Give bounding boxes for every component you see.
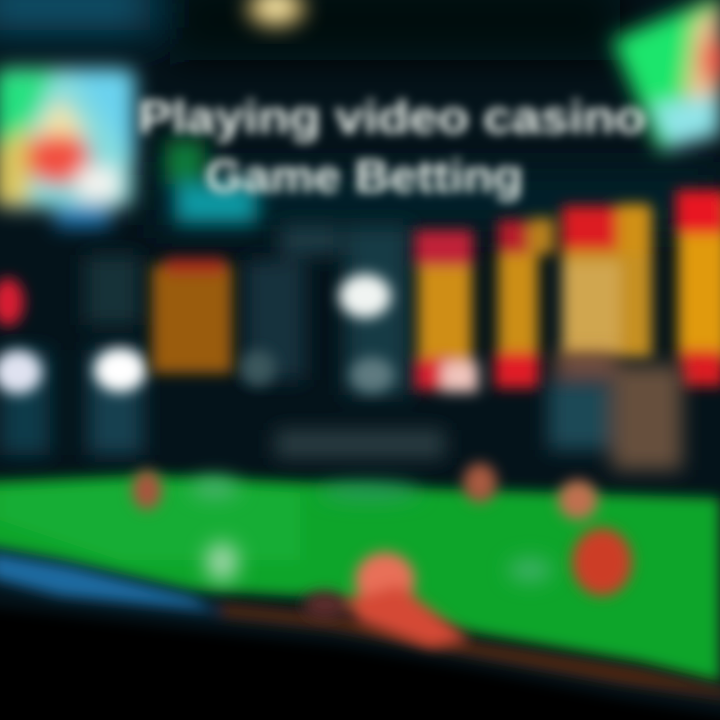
icon: left colourful sign bbox=[0, 68, 135, 227]
table surface bbox=[0, 475, 720, 682]
table rim bbox=[0, 552, 720, 698]
panel: dark slot columns left bbox=[0, 225, 445, 458]
table markings bbox=[191, 478, 552, 582]
top glow band bbox=[0, 0, 720, 225]
title bbox=[138, 91, 646, 202]
ceiling light bbox=[246, 0, 306, 28]
icon: right colourful sign bbox=[612, 0, 720, 152]
title: Game Betting bbox=[205, 150, 523, 202]
panel: white and red highlights left bbox=[0, 274, 394, 394]
chips and red pieces bbox=[132, 463, 632, 648]
panel: machine bases right bbox=[548, 355, 682, 470]
bottom black floor bbox=[0, 605, 720, 720]
panel: orange slot columns bbox=[152, 190, 720, 392]
panel: green table bbox=[0, 475, 720, 698]
icon: small teal sign below title bbox=[165, 140, 257, 223]
title: Playing video casino bbox=[138, 91, 646, 143]
